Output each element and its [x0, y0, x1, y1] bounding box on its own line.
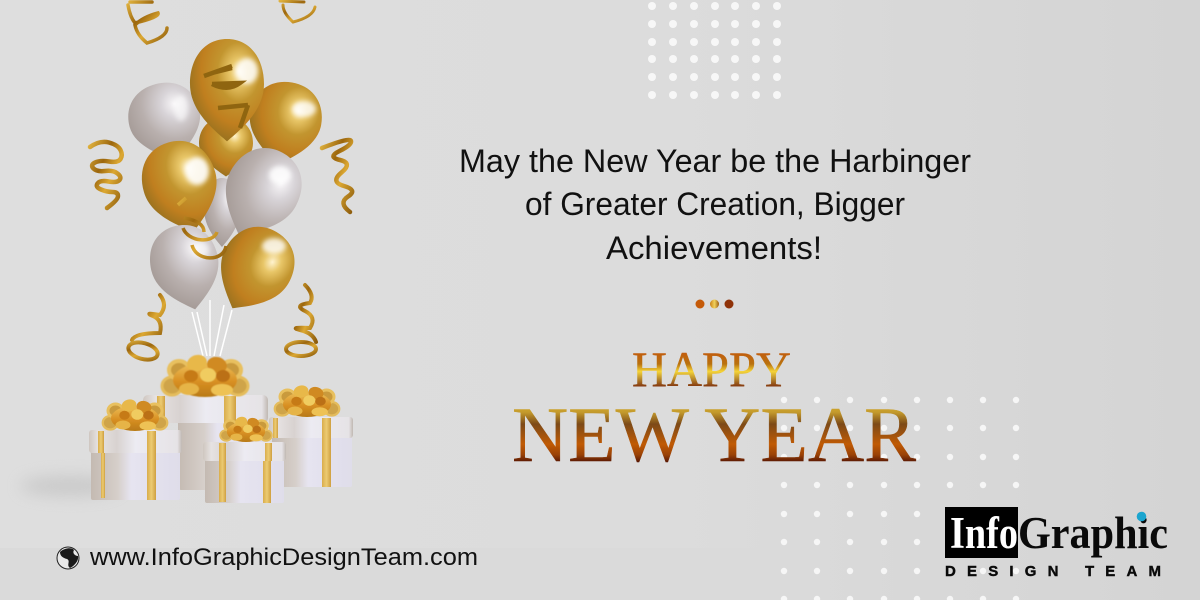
three dot divider [696, 300, 734, 308]
logo black box [945, 507, 1018, 558]
balloon: gold top [190, 39, 264, 141]
balloon bunch [121, 39, 328, 326]
balloon: silver middle right [206, 135, 315, 252]
balloon: silver upper left [121, 75, 210, 169]
ribbon: lower right [296, 285, 316, 342]
balloon: silver lower left [143, 218, 228, 317]
curled ribbon over balloons [178, 198, 226, 258]
gift: right [269, 384, 353, 487]
heading: new year: NEW YEAR [512, 391, 916, 478]
gift shadow [20, 476, 120, 496]
logo word: info: Info [950, 508, 1018, 558]
balloon: gold upper right [242, 76, 328, 171]
balloon: gold back [199, 117, 253, 177]
balloon: gold middle left [133, 132, 229, 242]
gift boxes [89, 353, 353, 503]
ribbon: lower right ring [286, 342, 316, 356]
balloon: silver back [204, 178, 240, 247]
dot grid: bottom right [781, 397, 1019, 600]
icon: globe [57, 547, 79, 569]
balloon strings [192, 300, 232, 356]
headline message [459, 143, 971, 266]
headline message: May the New Year be the Harbinger [459, 143, 971, 179]
gift: large back [143, 353, 268, 490]
confetti ribbons [90, 1, 352, 363]
gift: left [89, 398, 182, 500]
headline message: of Greater Creation, Bigger [525, 186, 905, 222]
ribbon: top middle [280, 1, 315, 22]
headline message: Achievements! [606, 230, 822, 266]
dot grid: top [648, 2, 781, 99]
gift: middle front [203, 415, 286, 503]
balloon: gold lower right [201, 214, 308, 326]
logo [945, 507, 1168, 580]
ribbon: top left [128, 2, 167, 43]
ribbon: lower left ring [126, 339, 160, 363]
website row [57, 544, 478, 571]
ribbon: left spiral [90, 142, 122, 208]
logo word: graphic: Graphic [1018, 508, 1168, 558]
logo tagline: DESIGN TEAM [945, 563, 1161, 580]
website url: www.InfoGraphicDesignTeam.com [89, 544, 478, 571]
background soft panel [0, 548, 783, 600]
logo teal dot [1137, 512, 1146, 521]
ribbon: right spiral [322, 140, 352, 212]
ribbon: lower left [132, 295, 164, 340]
heading: happy: HAPPY [632, 341, 791, 397]
